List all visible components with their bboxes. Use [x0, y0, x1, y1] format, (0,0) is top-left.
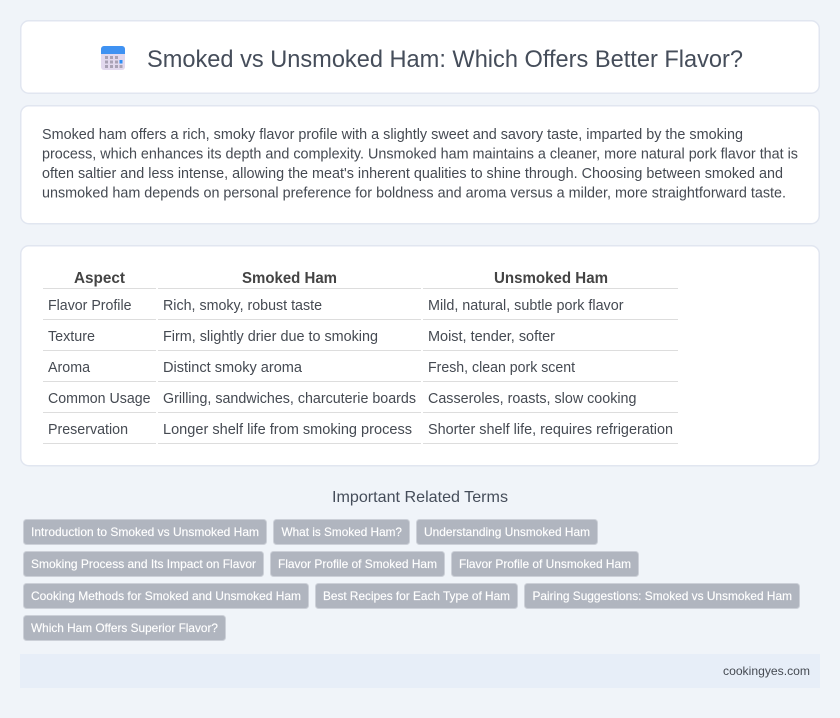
table row: texture	[43, 329, 678, 350]
table row: preservation: Preservation	[48, 422, 128, 438]
table row: texture: Firm, slightly drier due to smoking	[163, 329, 378, 345]
table row: flavor profile	[43, 298, 678, 320]
tag	[24, 616, 226, 640]
text block: summary: often saltier and less intense, allowing the meat's inherent qualities to shine through. Choosing between smoked and	[42, 166, 783, 182]
table header row: Aspect	[74, 270, 125, 287]
footer bar	[20, 654, 820, 688]
table row: preservation: Longer shelf life from smoking process	[163, 422, 412, 438]
tag: Introduction to Smoked vs Unsmoked Ham	[31, 525, 259, 539]
tag	[416, 520, 598, 544]
table row: aroma: Aroma	[48, 360, 90, 376]
table row: aroma: Fresh, clean pork scent	[428, 360, 575, 376]
table row: common usage	[43, 391, 678, 412]
tag	[24, 520, 266, 544]
tag: Flavor Profile of Smoked Ham	[278, 557, 437, 571]
tag: Cooking Methods for Smoked and Unsmoked Ham	[31, 589, 301, 603]
text block: summary	[42, 127, 798, 202]
table row: flavor profile: Flavor Profile	[48, 298, 132, 314]
text block: summary: Smoked ham offers a rich, smoky flavor profile with a slightly sweet and savory taste, imparted by the smoking	[42, 127, 743, 143]
tag: Understanding Unsmoked Ham	[424, 525, 590, 539]
table row: flavor profile: Rich, smoky, robust taste	[163, 298, 322, 314]
tag: Best Recipes for Each Type of Ham	[323, 589, 510, 603]
text block: summary: process, which enhances its depth and complexity. Unsmoked ham maintains a cleaner, more natural pork flavor that is	[42, 146, 798, 162]
panel: summary paragraph	[21, 106, 819, 224]
title: Smoked vs Unsmoked Ham: Which Offers Better Flavor?	[147, 46, 743, 73]
tag	[524, 584, 800, 608]
related term tags	[24, 520, 800, 640]
table row: preservation: Shorter shelf life, requires refrigeration	[428, 422, 673, 438]
table header row: Unsmoked Ham	[494, 270, 608, 287]
table row: common usage: Casseroles, roasts, slow cooking	[428, 391, 636, 407]
tag	[270, 552, 444, 576]
table row: preservation	[43, 422, 678, 444]
tag	[316, 584, 518, 608]
tag	[452, 552, 638, 576]
table row: texture: Moist, tender, softer	[428, 329, 555, 345]
footer source text: cookingyes.com	[723, 664, 810, 678]
table row: common usage: Common Usage	[48, 391, 150, 407]
table header row	[43, 270, 678, 288]
tag: Which Ham Offers Superior Flavor?	[31, 621, 218, 635]
table row: aroma: Distinct smoky aroma	[163, 360, 302, 376]
table row: aroma	[43, 360, 678, 382]
icon: calendar	[101, 46, 125, 70]
panel: comparison table	[21, 246, 819, 466]
tag: Pairing Suggestions: Smoked vs Unsmoked Ham	[532, 589, 792, 603]
tag: What is Smoked Ham?	[282, 525, 402, 539]
tag	[274, 520, 410, 544]
tag: Smoking Process and Its Impact on Flavor	[31, 557, 256, 571]
tag	[24, 584, 308, 608]
header panel	[21, 21, 819, 93]
table header row: Smoked Ham	[242, 270, 337, 287]
tag	[24, 552, 264, 576]
table row: common usage: Grilling, sandwiches, charcuterie boards	[163, 391, 416, 407]
table row: texture: Texture	[48, 329, 95, 345]
text block: summary: unsmoked ham depends on personal preference for boldness and aroma versus a milder, more straightforward taste.	[42, 186, 786, 202]
tag: Flavor Profile of Unsmoked Ham	[459, 557, 631, 571]
table row: flavor profile: Mild, natural, subtle pork flavor	[428, 298, 624, 314]
heading: important related terms: Important Related Terms	[332, 489, 508, 506]
